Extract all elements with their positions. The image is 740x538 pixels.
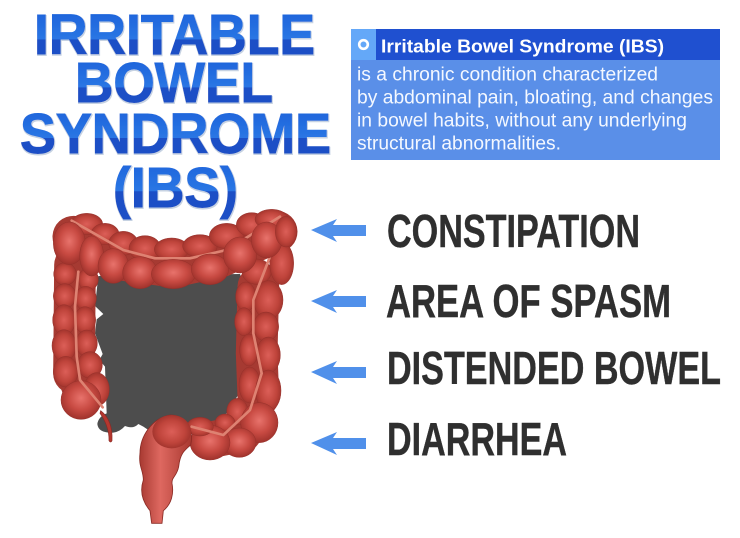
arrow (311, 361, 366, 384)
title (20, 3, 331, 220)
title: IRRITABLE (34, 3, 315, 67)
panel header bar (351, 29, 720, 60)
arrow (311, 290, 366, 313)
panel body text: by abdominal pain, bloating, and changes (357, 88, 713, 108)
title: (IBS) (113, 156, 238, 220)
panel body text (357, 64, 713, 154)
ascending colon (52, 263, 109, 419)
panel: definition (351, 29, 720, 160)
panel heading: Irritable Bowel Syndrome (IBS) (381, 36, 664, 57)
panel body text: structural abnormalities. (357, 134, 561, 154)
rectum (140, 415, 191, 523)
panel body text: in bowel habits, without any underlying (357, 110, 687, 132)
label: constipation: CONSTIPATION (387, 205, 640, 257)
appendix (100, 411, 112, 442)
illustration: large intestine (52, 209, 297, 523)
dark grey intestine interior (95, 274, 244, 433)
descending colon (187, 242, 294, 460)
icon: bullet ring (351, 29, 376, 60)
label: area of spasm (311, 275, 671, 327)
arrow (311, 432, 366, 455)
label: diarrhea: DIARRHEA (387, 413, 567, 465)
colon base silhouette (73, 232, 277, 440)
panel body text: is a chronic condition characterized (357, 64, 658, 86)
arrow (311, 219, 366, 242)
title: SYNDROME (20, 102, 331, 166)
title: BOWEL (75, 51, 273, 115)
label: diarrhea (311, 413, 567, 465)
label: constipation (311, 205, 640, 257)
transverse colon (53, 209, 297, 289)
